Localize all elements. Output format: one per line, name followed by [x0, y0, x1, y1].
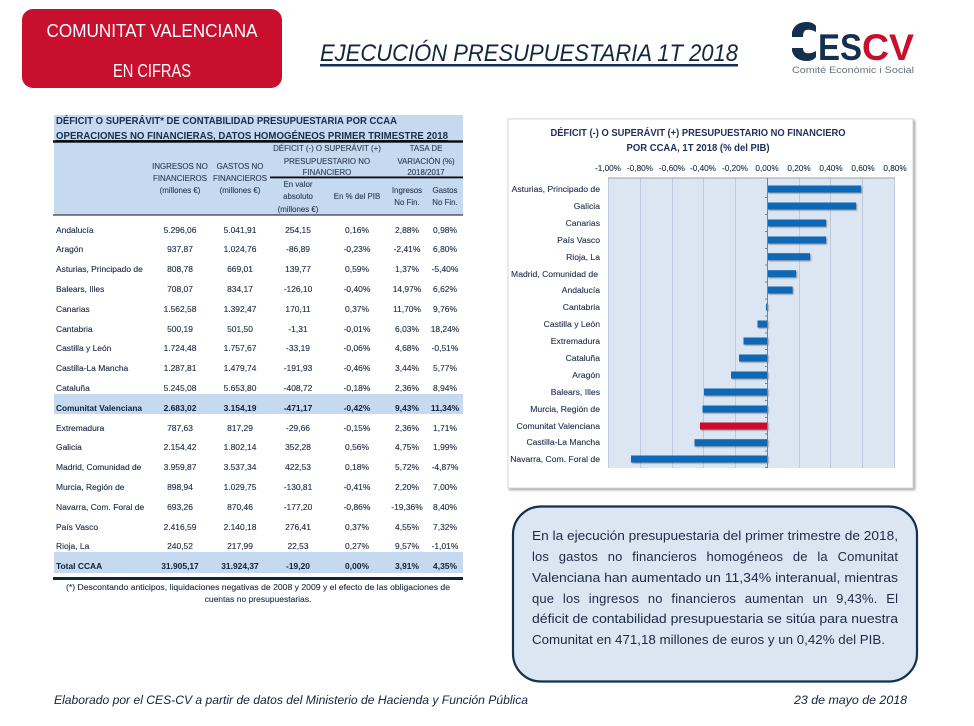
row: Comunitat Valenciana: 9,43% — [395, 403, 419, 413]
row: Madrid: 0,18% — [345, 462, 369, 472]
title: EJECUCIÓN PRESUPUESTARIA 1T 2018 — [320, 40, 739, 67]
x axis labels: -0,20% — [722, 164, 748, 173]
x axis labels: 0,00% — [755, 164, 779, 173]
row: Cataluña: 2,36% — [395, 383, 419, 393]
row: Asturias: Asturias, Principado de — [56, 264, 143, 274]
table header: FINANCIEROS — [213, 174, 267, 183]
row: Andalucía: 5.041,91 — [224, 225, 257, 235]
row: Asturias — [56, 264, 459, 274]
row: País Vasco: 0,37% — [345, 522, 369, 532]
row: Canarias: 0,37% — [345, 304, 369, 314]
row: País Vasco — [56, 522, 457, 532]
row: Murcia: -0,41% — [344, 482, 371, 492]
row: Castilla-La Mancha: -191,93 — [284, 363, 313, 373]
row: Asturias: 808,78 — [167, 264, 193, 274]
row: Asturias: 139,77 — [285, 264, 311, 274]
table title — [54, 114, 463, 142]
table header: TASA DE — [410, 144, 442, 153]
row: Canarias: 9,76% — [433, 304, 457, 314]
bars — [631, 186, 861, 462]
zero axis — [765, 178, 768, 468]
category labels: Galicia — [574, 201, 600, 211]
row: Navarra: -0,86% — [344, 502, 371, 512]
row: Castilla-La Mancha: 1.287,81 — [164, 363, 197, 373]
plot area and gridlines — [608, 178, 895, 468]
row: Cataluña: 8,94% — [433, 383, 457, 393]
panel: data table — [53, 114, 463, 604]
row: Madrid: 3.959,87 — [164, 462, 197, 472]
row: Murcia: 2,20% — [395, 482, 419, 492]
row: País Vasco: 2.416,59 — [164, 522, 197, 532]
row: Andalucía: 0,98% — [433, 225, 457, 235]
row: Cantabria: 500,19 — [167, 324, 193, 334]
table header: No Fin. — [394, 198, 420, 207]
row: Aragón: 937,87 — [167, 244, 193, 254]
table header: (millones €) — [220, 186, 261, 195]
table header: En % del PIB — [334, 192, 380, 201]
table footnote: (*) Descontando anticipos, liquidaciones negativas de 2008 y 2009 y el efecto de las obligaciones de — [66, 582, 450, 592]
row: Castilla y León: -0,06% — [344, 343, 371, 353]
badge: Comunitat Valenciana en cifras — [22, 9, 282, 88]
table header: (millones €) — [160, 186, 201, 195]
row: Asturias: 0,59% — [345, 264, 369, 274]
row: Aragón — [56, 244, 457, 254]
category labels: Extremadura — [551, 336, 600, 346]
row: Navarra: -19,36% — [391, 502, 423, 512]
table header: 2018/2017 — [407, 168, 445, 177]
badge: Comunitat Valenciana en cifras: COMUNITAT VALENCIANA — [46, 21, 258, 41]
row: Cantabria: Cantabria — [56, 324, 93, 334]
row: País Vasco: País Vasco — [56, 522, 98, 532]
row: Rioja: 9,57% — [395, 541, 419, 551]
x axis labels: -0,60% — [659, 164, 685, 173]
row: Castilla-La Mancha: -0,46% — [344, 363, 371, 373]
footer: source: Elaborado por el CES-CV a partir de datos del Ministerio de Hacienda y Función Pública — [54, 693, 528, 707]
row: Rioja: -1,01% — [432, 541, 459, 551]
row: Madrid: 5,72% — [395, 462, 419, 472]
row: Aragón: -2,41% — [394, 244, 421, 254]
row: Cataluña: -0,18% — [344, 383, 371, 393]
row: Andalucía — [56, 225, 457, 235]
chart title: POR CCAA, 1T 2018 (% del PIB) — [626, 143, 770, 154]
row: Aragón: -0,23% — [344, 244, 371, 254]
row: Comunitat Valenciana: -0,42% — [344, 403, 371, 413]
row: Comunitat Valenciana: Comunitat Valenciana — [56, 403, 142, 413]
row: Rioja: Rioja, La — [56, 541, 90, 551]
row: Balears: 14,97% — [393, 284, 422, 294]
row: Andalucía: 5.296,06 — [164, 225, 197, 235]
row: Cataluña: 5.653,80 — [224, 383, 257, 393]
row: Extremadura: 817,29 — [227, 423, 253, 433]
table header: VARIACIÓN (%) — [397, 157, 455, 166]
row: Extremadura: 787,63 — [167, 423, 193, 433]
row: Cantabria: 6,03% — [395, 324, 419, 334]
x axis labels — [595, 164, 907, 173]
row: Castilla-La Mancha: 1.479,74 — [224, 363, 257, 373]
row: Cataluña: -408,72 — [284, 383, 313, 393]
row: Extremadura: -0,15% — [344, 423, 371, 433]
callout: summary text: que los ingresos no financieros aumentan un 9,43%. El — [532, 591, 898, 606]
row: Cataluña: 5.245,08 — [164, 383, 197, 393]
row: Balears — [56, 284, 457, 294]
row: Navarra: 693,26 — [167, 502, 193, 512]
row: Asturias: 1,37% — [395, 264, 419, 274]
row: Balears: 708,07 — [167, 284, 193, 294]
row: Comunitat Valenciana — [56, 403, 460, 413]
row: Navarra: -177,20 — [284, 502, 313, 512]
row: Rioja: 0,27% — [345, 541, 369, 551]
x axis labels: 0,80% — [883, 164, 907, 173]
row: Extremadura: 1,71% — [433, 423, 457, 433]
row: Comunitat Valenciana: 3.154,19 — [224, 403, 257, 413]
table header: DÉFICIT (-) O SUPERÁVIT (+) — [273, 144, 381, 153]
logo: CESCV: Comité Econòmic i Social — [792, 65, 914, 76]
row: Castilla y León: 1.724,48 — [164, 343, 197, 353]
row: Rioja: 217,99 — [227, 541, 253, 551]
row: Galicia: Galicia — [56, 442, 82, 452]
panel: bar chart — [508, 119, 913, 488]
row: Cantabria: -1,31 — [288, 324, 308, 334]
table title: DÉFICIT O SUPERÁVIT* DE CONTABILIDAD PRESUPUESTARIA POR CCAA — [56, 114, 397, 127]
category labels: Madrid, Comunidad de — [511, 269, 598, 279]
row: Canarias: Canarias — [56, 304, 90, 314]
row: País Vasco: 276,41 — [285, 522, 311, 532]
x axis labels: 0,40% — [819, 164, 843, 173]
logo: CESCV: ES — [818, 27, 862, 68]
row: Murcia: 7,00% — [433, 482, 457, 492]
row: Total CCAA — [56, 561, 457, 571]
row: Galicia: 2.154,42 — [164, 442, 197, 452]
category labels: Asturias, Principado de — [512, 184, 600, 194]
row: Aragón: 6,80% — [433, 244, 457, 254]
row: Balears: 834,17 — [227, 284, 253, 294]
row: Galicia — [56, 442, 457, 452]
row: Murcia: 898,94 — [167, 482, 193, 492]
x axis labels: 0,20% — [787, 164, 811, 173]
row: Comunitat Valenciana: 2.683,02 — [164, 403, 197, 413]
category labels: Cantabria — [563, 302, 600, 312]
row: Navarra: Navarra, Com. Foral de — [56, 502, 144, 512]
table title: OPERACIONES NO FINANCIERAS, DATOS HOMOGÉNEOS PRIMER TRIMESTRE 2018 — [56, 129, 448, 142]
table header — [53, 140, 463, 216]
row: Asturias: -5,40% — [432, 264, 459, 274]
category labels: Cataluña — [566, 353, 600, 363]
row: Madrid: 422,53 — [285, 462, 311, 472]
x axis labels: -0,80% — [627, 164, 653, 173]
category labels — [510, 184, 600, 464]
row: Cantabria: 501,50 — [227, 324, 253, 334]
row: Comunitat Valenciana: 11,34% — [431, 403, 460, 413]
category labels: Murcia, Región de — [530, 404, 600, 414]
x axis labels: -0,40% — [690, 164, 716, 173]
category labels: Canarias — [566, 218, 600, 228]
table header: (millones €) — [278, 205, 319, 214]
table header: INGRESOS NO — [152, 162, 208, 171]
row: Navarra: 870,46 — [227, 502, 253, 512]
row: Galicia: 1,99% — [433, 442, 457, 452]
row: Canarias: 1.392,47 — [224, 304, 257, 314]
row: País Vasco: 4,55% — [395, 522, 419, 532]
row: Murcia: Murcia, Región de — [56, 482, 125, 492]
table header: Ingresos — [392, 186, 422, 195]
table header: FINANCIERO — [303, 168, 351, 177]
table header: Gastos — [432, 186, 458, 195]
x axis labels: -1,00% — [595, 164, 621, 173]
row: Balears: 6,62% — [433, 284, 457, 294]
x axis labels: 0,60% — [851, 164, 875, 173]
category labels: Comunitat Valenciana — [517, 421, 600, 431]
row: Total CCAA: 4,35% — [433, 561, 457, 571]
row: Rioja: 22,53 — [287, 541, 309, 551]
row: Aragón: Aragón — [56, 244, 84, 254]
row: Aragón: -86,89 — [286, 244, 310, 254]
row: Rioja — [56, 541, 459, 551]
category labels: Aragón — [572, 370, 600, 380]
row: Andalucía: Andalucía — [56, 225, 94, 235]
row: Extremadura — [56, 423, 457, 433]
row: Andalucía: 254,15 — [285, 225, 311, 235]
row: Total CCAA: 31.905,17 — [161, 561, 199, 571]
chart title — [550, 126, 846, 154]
row: Cataluña — [56, 383, 457, 393]
row: Total CCAA: -19,20 — [286, 561, 310, 571]
row: Castilla y León: 4,68% — [395, 343, 419, 353]
row: Canarias — [56, 304, 457, 314]
logo: CESCV: CV — [862, 27, 914, 68]
row: Cantabria: -0,01% — [344, 324, 371, 334]
row: Madrid — [56, 462, 459, 472]
row: Castilla-La Mancha: 3,44% — [395, 363, 419, 373]
table header: PRESUPUESTARIO NO — [284, 157, 370, 166]
row: Extremadura: Extremadura — [56, 423, 105, 433]
callout: summary text: En la ejecución presupuestaria del primer trimestre de 2018, — [532, 528, 898, 543]
row: Castilla y León: 1.757,67 — [224, 343, 257, 353]
row: Balears: -0,40% — [344, 284, 371, 294]
table rows — [56, 225, 460, 571]
row: Navarra: 8,40% — [433, 502, 457, 512]
row: Total CCAA: 31.924,37 — [221, 561, 259, 571]
logo: CESCV — [792, 22, 914, 76]
row: Galicia: 4,75% — [395, 442, 419, 452]
category labels: Castilla y León — [544, 319, 600, 329]
table header: FINANCIEROS — [153, 174, 207, 183]
table header: GASTOS NO — [217, 162, 263, 171]
category labels: Andalucía — [562, 285, 600, 295]
callout: summary text: los gastos no financieros homogéneos de la Comunitat — [532, 549, 898, 564]
row: Castilla-La Mancha — [56, 363, 457, 373]
row: Asturias: 669,01 — [227, 264, 253, 274]
badge: Comunitat Valenciana en cifras: EN CIFRAS — [113, 61, 191, 81]
row: Total CCAA: 0,00% — [345, 561, 369, 571]
row: Galicia: 0,56% — [345, 442, 369, 452]
row: Madrid: 3.537,34 — [224, 462, 257, 472]
row highlight: Comunitat Valenciana — [54, 394, 463, 414]
row: Navarra — [56, 502, 457, 512]
row: Cataluña: Cataluña — [56, 383, 90, 393]
table header: No Fin. — [432, 198, 458, 207]
table header: absoluto — [283, 192, 314, 201]
row: Murcia: 1.029,75 — [224, 482, 257, 492]
row: Murcia — [56, 482, 457, 492]
row: Andalucía: 2,88% — [395, 225, 419, 235]
row: Murcia: -130,81 — [284, 482, 313, 492]
row: Canarias: 1.562,58 — [164, 304, 197, 314]
row: Castilla y León: Castilla y León — [56, 343, 112, 353]
row: Balears: -126,10 — [284, 284, 313, 294]
row: Madrid: Madrid, Comunidad de — [56, 462, 142, 472]
callout: summary text: Comunitat en 471,18 millones de euros y un 0,42% del PIB. — [532, 632, 885, 647]
row: Galicia: 352,28 — [285, 442, 311, 452]
table footnote — [66, 582, 450, 604]
footer: date: 23 de mayo de 2018 — [793, 693, 907, 707]
row: Castilla y León: -33,19 — [286, 343, 310, 353]
callout: summary text: déficit de contabilidad presupuestaria se sitúa para nuestra — [532, 611, 899, 626]
row: Madrid: -4,87% — [432, 462, 459, 472]
row: Galicia: 1.802,14 — [224, 442, 257, 452]
row: Total CCAA: Total CCAA — [56, 561, 102, 571]
row: Castilla y León: -0,51% — [432, 343, 459, 353]
row: Canarias: 170,11 — [285, 304, 311, 314]
category labels: Castilla-La Mancha — [526, 437, 600, 447]
row: Castilla-La Mancha: 5,77% — [433, 363, 457, 373]
row: Extremadura: 2,36% — [395, 423, 419, 433]
row: Castilla y León — [56, 343, 459, 353]
row: Total CCAA: 3,91% — [395, 561, 419, 571]
row: Aragón: 1.024,76 — [224, 244, 257, 254]
row: País Vasco: 7,32% — [433, 522, 457, 532]
row: Andalucía: 0,16% — [345, 225, 369, 235]
row: Cantabria: 18,24% — [431, 324, 460, 334]
table footnote: cuentas no presupuestarias. — [205, 594, 311, 604]
table header: En valor — [284, 180, 313, 189]
row: Extremadura: -29,66 — [286, 423, 310, 433]
category labels: Rioja, La — [566, 252, 600, 262]
row: Cantabria — [56, 324, 460, 334]
row: Rioja: 240,52 — [167, 541, 193, 551]
row: Comunitat Valenciana: -471,17 — [284, 403, 313, 413]
category labels: Balears, Illes — [551, 387, 600, 397]
row: Balears: Balears, Illes — [56, 284, 104, 294]
callout: summary text — [513, 506, 917, 682]
row: Canarias: 11,70% — [393, 304, 421, 314]
chart title: DÉFICIT (-) O SUPERÁVIT (+) PRESUPUESTARIO NO FINANCIERO — [550, 126, 846, 139]
callout: summary text: Valenciana han aumentado un 11,34% interanual, mientras — [532, 570, 899, 585]
row: Castilla-La Mancha: Castilla-La Mancha — [56, 363, 129, 373]
category labels: País Vasco — [557, 235, 600, 245]
category labels: Navarra, Com. Foral de — [510, 454, 600, 464]
row highlight: Total CCAA — [54, 552, 463, 573]
row: País Vasco: 2.140,18 — [224, 522, 257, 532]
